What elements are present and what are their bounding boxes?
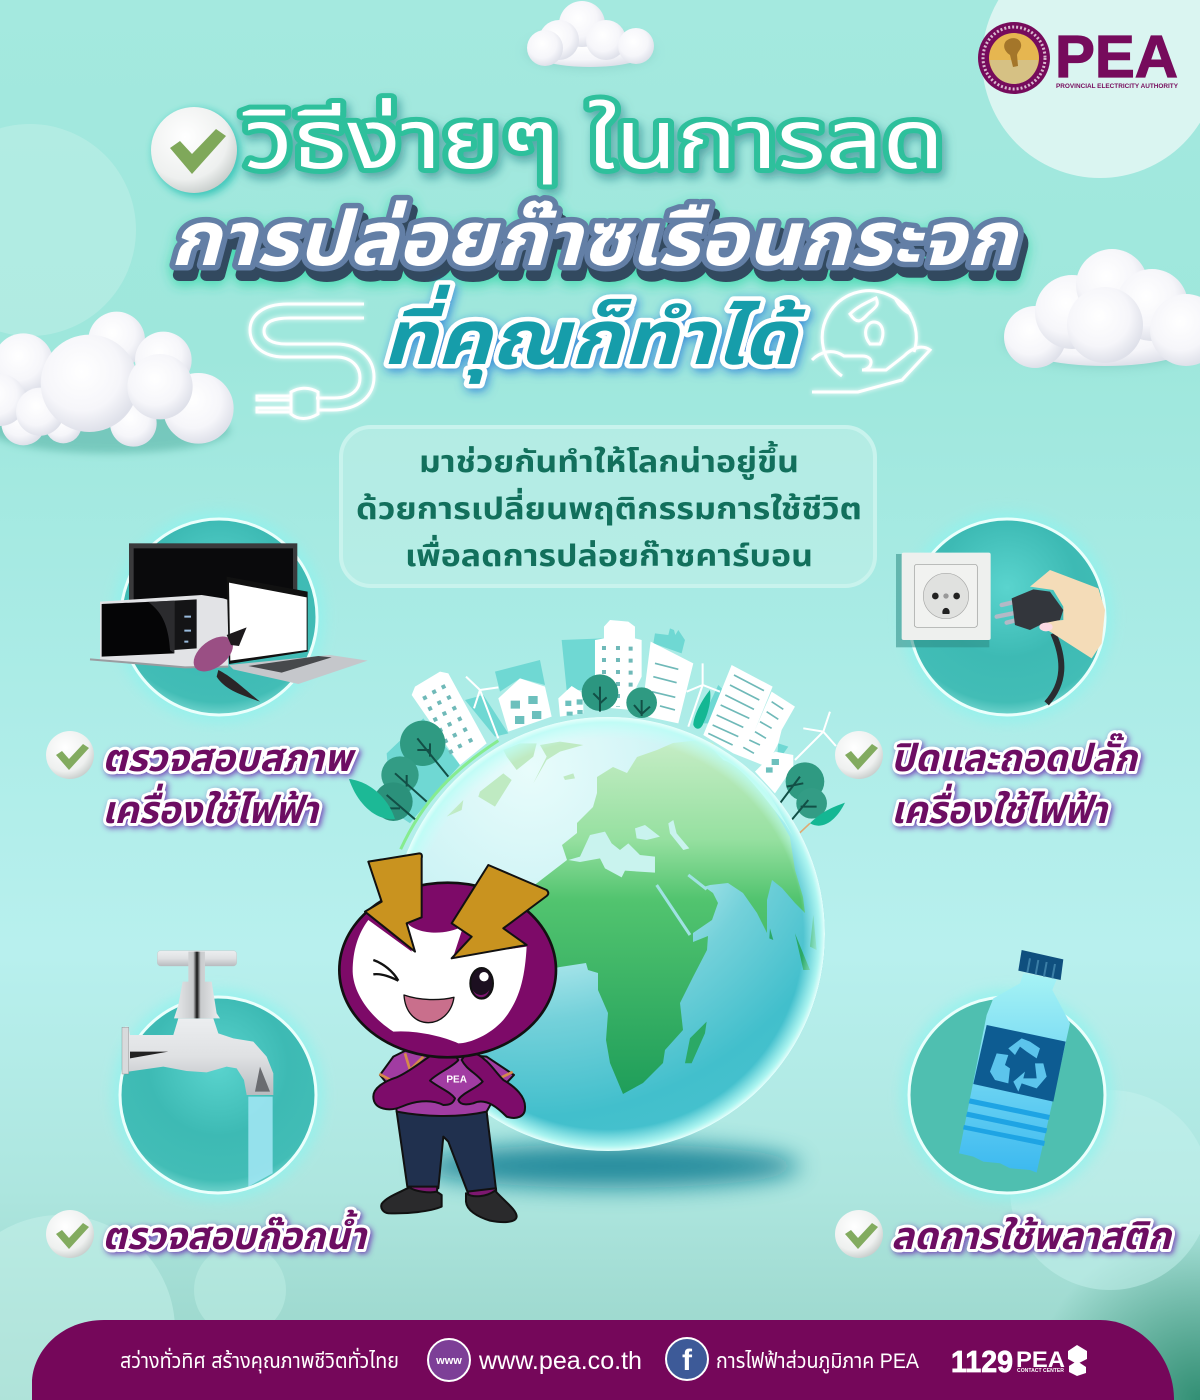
logo: PEA: [978, 22, 1179, 94]
mascot mouth: [404, 995, 454, 1023]
intro line 1: มาช่วยกันทำให้โลกน่าอยู่ขึ้น: [419, 440, 799, 480]
panel: unplug: [896, 511, 1113, 723]
globe pale northern land: [401, 741, 793, 849]
mascot head: [339, 883, 556, 1057]
mascot shirt label: PEA: [446, 1075, 467, 1086]
logo emblem: [978, 22, 1050, 94]
icon: check: [46, 1210, 94, 1258]
label: check appliance condition: เครื่องใช้ไฟฟ้า: [102, 783, 320, 832]
mascot heart hands: [373, 1051, 525, 1118]
intro line 3: เพื่อลดการปล่อยก๊าซคาร์บอน: [405, 534, 813, 573]
icon: bottle: [959, 950, 1070, 1173]
globe seas and islands: [568, 820, 817, 1063]
title line 1: วิธีง่ายๆ ในการลด: [242, 95, 944, 186]
icon: facebook: f: [682, 1344, 693, 1377]
bubble: [113, 511, 325, 723]
mascot: [339, 853, 556, 1222]
mascot bolts: [365, 853, 548, 958]
logo wordmark: PEA: [1055, 24, 1178, 90]
label: check taps: ตรวจสอบก๊อกน้ำ: [102, 1209, 368, 1258]
footer facebook name: การไฟฟ้าส่วนภูมิภาค PEA: [716, 1349, 919, 1374]
footer call centre: [951, 1344, 1087, 1379]
icon: neon globe in hand: [812, 291, 930, 392]
intro line 2: ด้วยการเปลี่ยนพฤติกรรมการใช้ชีวิต: [356, 487, 862, 526]
icon: television: [129, 543, 297, 602]
icon: socket: [896, 553, 991, 647]
mascot eyes: [373, 960, 493, 999]
globe: [391, 717, 825, 1188]
icon: check: [46, 731, 94, 779]
icon: www: [428, 1339, 470, 1381]
icon: microwave: [90, 595, 228, 667]
footer call centre: 1129: [951, 1344, 1013, 1379]
cloud: top right: [1004, 249, 1200, 368]
mascot face: [353, 920, 527, 1043]
label: check appliance condition: [46, 731, 356, 832]
intro text panel: [341, 427, 875, 586]
footer slogan: สว่างทั่วทิศ สร้างคุณภาพชีวิตทั่วไทย: [120, 1347, 399, 1374]
label: turn off and unplug: ปิดและถอดปลั๊ก: [891, 732, 1139, 780]
icon: facebook: [666, 1338, 708, 1380]
title line 3: ที่คุณก็ทำได้: [382, 285, 806, 384]
footer bar: [32, 1320, 1174, 1400]
trees: [374, 674, 845, 833]
mascot socks and shoes: [381, 1187, 517, 1222]
city on globe: [374, 620, 845, 833]
cloud: left: [0, 312, 234, 453]
title line 2: การปล่อยก๊าซเรือนกระจก: [170, 197, 1020, 282]
panel: plastic bottle: [901, 950, 1113, 1201]
mascot shirt: [380, 1050, 514, 1116]
title: [151, 95, 1024, 384]
label: turn off and unplug: [835, 731, 1139, 832]
cloud: top centre: [526, 1, 654, 68]
mascot legs: [397, 1112, 496, 1194]
icon: www: www: [435, 1355, 462, 1367]
icon: check: [835, 731, 883, 779]
icon: plug and hand: [997, 570, 1105, 703]
footer call centre: PEA: [1016, 1347, 1065, 1372]
globe land: Eurasia and Africa: [515, 740, 805, 1094]
panel: water tap: [112, 951, 324, 1201]
footer website: www.pea.co.th: [478, 1347, 642, 1375]
logo subtitle: PROVINCIAL ELECTRICITY AUTHORITY: [1056, 83, 1179, 90]
title line 2: การปล่อยก๊าซเรือนกระจก: [174, 207, 1024, 292]
footer call centre: CONTACT CENTER: [1017, 1368, 1064, 1374]
icon: hair dryer: [187, 627, 260, 702]
icon: neon plug: [250, 304, 374, 418]
label: check appliance condition: ตรวจสอบสภาพ: [102, 738, 356, 780]
label: reduce plastic: ลดการใช้พลาสติก: [891, 1216, 1173, 1258]
icon: tap: [122, 951, 273, 1187]
leaf left: [349, 779, 395, 819]
icon: title check: [151, 107, 241, 197]
icon: laptop: [227, 577, 368, 684]
icon: check: [835, 1210, 883, 1258]
panel: electrical appliances: [90, 511, 368, 723]
label: turn off and unplug: เครื่องใช้ไฟฟ้า: [891, 783, 1109, 832]
